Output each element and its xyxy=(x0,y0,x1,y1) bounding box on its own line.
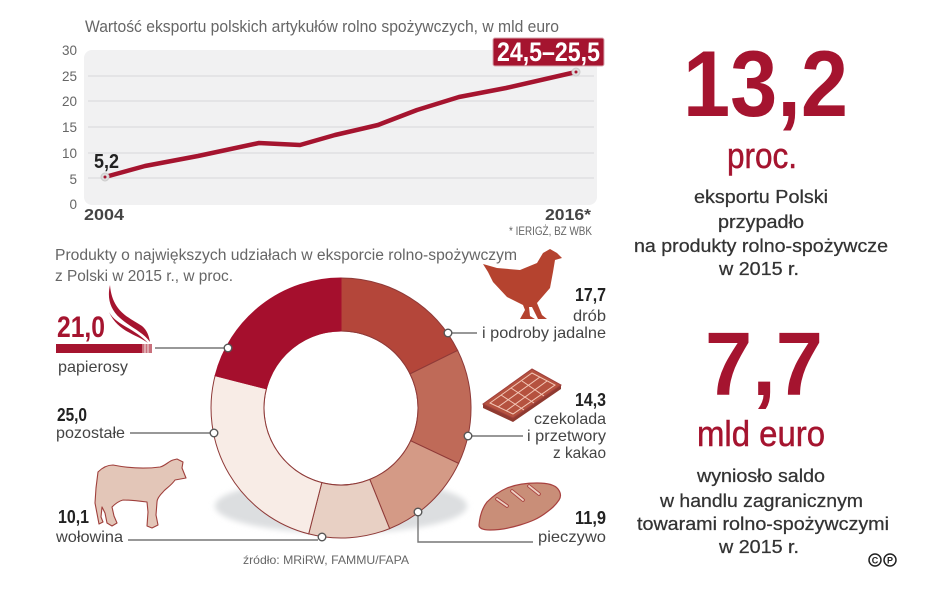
leader xyxy=(128,533,326,541)
y axis labels: 10 xyxy=(62,146,77,161)
description: w 2015 r. xyxy=(718,537,799,557)
icon: chicken xyxy=(483,249,562,319)
description: towarami rolno-spożywczymi xyxy=(637,514,889,534)
y axis labels: 5 xyxy=(69,172,77,187)
copyright mark: P xyxy=(887,556,893,566)
value label 5,2: 5,2 xyxy=(94,151,119,173)
chart title: Wartość eksportu polskich artykułów rolno spożywczych, w mld euro xyxy=(85,18,559,36)
stat block: 13,2 proc. xyxy=(634,31,888,279)
description xyxy=(634,187,888,279)
segment: papierosy xyxy=(215,278,341,389)
donut hole xyxy=(264,331,418,485)
label xyxy=(482,308,606,342)
label: z kakao xyxy=(553,445,606,462)
label: pozostałe xyxy=(56,425,125,442)
icon: cow xyxy=(95,459,186,528)
label xyxy=(527,411,606,462)
value: 10,1 xyxy=(58,507,89,527)
y axis labels: 25 xyxy=(62,69,77,84)
description: w 2015 r. xyxy=(718,259,799,279)
label: i przetwory xyxy=(527,428,606,445)
label: drób xyxy=(573,308,606,325)
value: 21,0 xyxy=(57,311,105,344)
label: czekolada xyxy=(534,411,606,428)
big number: 13,2 xyxy=(683,31,848,136)
donut source: źródło: MRiRW, FAMMU/FAPA xyxy=(243,553,409,567)
segment: pieczywo xyxy=(370,441,459,529)
leader xyxy=(130,429,218,437)
description xyxy=(637,466,889,557)
label: wołowina xyxy=(55,529,123,546)
description: przypadło xyxy=(718,212,804,232)
x axis labels xyxy=(84,207,592,224)
callout: pozostałe xyxy=(56,405,218,442)
value label 24,5–25,5: 24,5–25,5 xyxy=(497,37,600,67)
leader xyxy=(155,344,232,352)
donut section heading: Produkty o największych udziałach w eksporcie rolno-spożywczym xyxy=(55,247,517,264)
big number: 7,7 xyxy=(705,315,823,415)
copyright mark xyxy=(869,554,896,566)
donut section heading: z Polski w 2015 r., w proc. xyxy=(55,268,233,285)
start marker xyxy=(101,173,109,181)
callout: pieczywo xyxy=(414,483,606,546)
segment: drób xyxy=(341,278,458,374)
x axis labels: 2016* xyxy=(545,207,592,224)
description: eksportu Polski xyxy=(694,187,828,207)
donut chart xyxy=(211,278,471,538)
donut shadow xyxy=(215,479,467,533)
description: na produkty rolno-spożywcze xyxy=(634,236,888,256)
leader xyxy=(444,329,477,337)
callout: drób xyxy=(444,249,606,342)
line chart: export value xyxy=(62,18,604,238)
segment: pozostałe xyxy=(211,376,322,534)
copyright mark: C xyxy=(872,556,879,566)
segment: wołowina xyxy=(309,479,390,538)
donut section heading xyxy=(55,247,517,285)
callout: wołowina xyxy=(55,459,326,546)
value: 17,7 xyxy=(575,285,606,305)
value: 14,3 xyxy=(575,390,606,410)
label: pieczywo xyxy=(538,529,606,546)
leader xyxy=(464,432,523,440)
y axis labels xyxy=(62,43,77,212)
value: 25,0 xyxy=(57,405,87,425)
description: wyniosło saldo xyxy=(696,466,825,486)
plot background xyxy=(84,50,597,205)
source note: * IERIGŻ, BZ WBK xyxy=(509,225,592,238)
label: i podroby jadalne xyxy=(482,325,606,342)
unit: proc. xyxy=(727,135,797,176)
y axis labels: 15 xyxy=(62,120,77,135)
icon: cigarette xyxy=(56,285,152,353)
stat block: 7,7 mld euro xyxy=(637,315,889,557)
y axis labels: 30 xyxy=(62,43,77,58)
y axis labels: 0 xyxy=(69,197,77,212)
segment: czekolada xyxy=(410,350,471,463)
unit: mld euro xyxy=(697,413,825,454)
y axis labels: 20 xyxy=(62,94,77,109)
leader xyxy=(414,508,533,542)
callout: papierosy xyxy=(56,285,232,376)
value: 11,9 xyxy=(575,508,606,528)
icon: chocolate bar xyxy=(483,369,561,422)
callout: czekolada xyxy=(464,369,606,462)
icon: bread xyxy=(479,483,560,530)
description: w handlu zagranicznym xyxy=(659,491,863,511)
data line xyxy=(105,72,576,177)
x axis labels: 2004 xyxy=(84,207,124,224)
label: papierosy xyxy=(58,359,128,376)
end marker xyxy=(572,68,580,76)
